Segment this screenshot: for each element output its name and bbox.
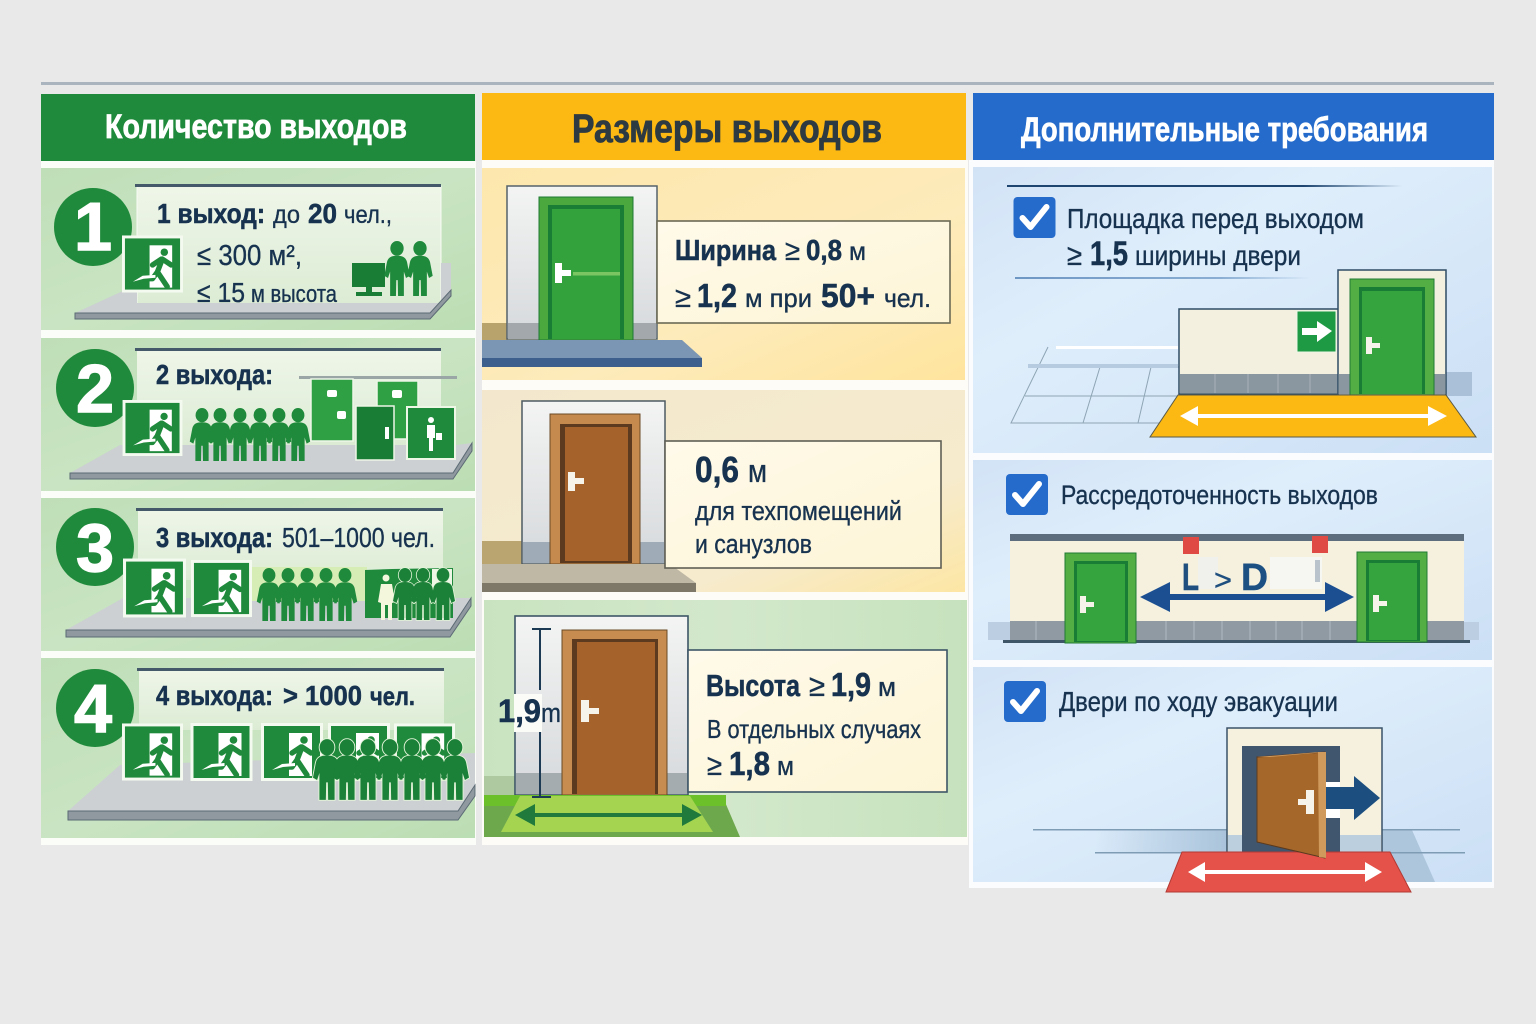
text: 2 выхода: 2 выхода: xyxy=(156,359,273,390)
callout: 0,6 м: и санузлов xyxy=(695,529,812,559)
markers: red squares xyxy=(1183,536,1328,554)
text: площадка: ≥ xyxy=(1067,239,1082,272)
number 2: 2 xyxy=(76,351,114,427)
callout: ширина: чел. xyxy=(884,283,931,313)
text: 1 выход: до xyxy=(273,201,300,229)
text: площадка xyxy=(1067,203,1364,273)
panel: ширина xyxy=(482,168,965,380)
text: 3 выхода xyxy=(156,522,435,553)
exit sign xyxy=(122,235,183,293)
callout: высота: м xyxy=(777,751,794,781)
text: 1 выход: ≤ 300 м², xyxy=(197,240,302,272)
text: 3 выхода: 501–1000 чел. xyxy=(282,522,435,553)
callout: ширина: ≥ xyxy=(675,282,691,314)
callout: высота: м xyxy=(878,672,896,702)
text: 4 выхода xyxy=(156,680,415,711)
wall xyxy=(988,534,1479,643)
text: 1 выход: м высота xyxy=(251,281,338,308)
mat: yellow with arrow xyxy=(1150,395,1476,437)
number 3: 3 xyxy=(76,510,114,586)
callout: высота: 1,9 xyxy=(831,666,871,703)
callout: ширина: 1,2 xyxy=(697,277,737,314)
wall with opening xyxy=(1227,728,1382,853)
number 2 xyxy=(56,349,134,427)
arrow: double distance xyxy=(1140,582,1354,612)
callout: высота: Высота xyxy=(706,668,801,703)
icon: crowd xyxy=(257,568,357,621)
door: brown narrow xyxy=(522,401,665,564)
callout: 0,6 м: м xyxy=(748,453,767,489)
text: 4 выхода: 4 выхода: xyxy=(156,680,273,711)
callout: высота: ≥ xyxy=(809,668,825,703)
floor lines xyxy=(1033,829,1465,882)
heading: дополнительные требования xyxy=(973,93,1494,160)
callout: 0,6 м: для техпомещений xyxy=(695,496,902,526)
door: brown with dimension xyxy=(515,616,688,795)
door: left xyxy=(1065,553,1136,643)
text: площадка: Площадка перед выходом xyxy=(1067,203,1364,234)
icon: computer and people xyxy=(352,241,433,296)
text: 4 выхода: > 1000 xyxy=(283,680,362,711)
exit signs xyxy=(122,723,455,781)
callout: ширина: Ширина xyxy=(675,235,777,267)
callout: ширина: 0,8 xyxy=(806,235,842,267)
text: площадка: ширины двери xyxy=(1135,240,1301,271)
door: green xyxy=(1338,270,1446,395)
callout: ширина: м при xyxy=(745,283,812,313)
dimension: 1,9 m: 1,9 xyxy=(498,693,541,729)
text: 4 выхода: чел. xyxy=(370,681,415,711)
heading: размеры выходов xyxy=(482,93,966,160)
mat: red with arrow xyxy=(1166,852,1411,892)
callout: высота: ≥ xyxy=(707,749,722,782)
panel: рассредоточенность выходов xyxy=(973,460,1492,660)
text: рассредоточенность: Рассредоточенность выходов xyxy=(1061,480,1378,510)
text: 1 выход: ≤ 15 xyxy=(197,277,245,308)
exit signs xyxy=(123,559,252,617)
panel: высота xyxy=(484,600,967,837)
label: L > D: L xyxy=(1182,557,1199,599)
text: 1 выход: 20 xyxy=(308,198,337,229)
number 4: 4 xyxy=(74,671,112,747)
panel: 1 выход xyxy=(41,168,475,330)
wall with exit sign xyxy=(1179,309,1340,394)
panel: 2 выхода xyxy=(41,338,475,491)
icon: checkbox xyxy=(1004,681,1046,722)
callout: высота xyxy=(688,650,947,792)
panel: 3 выхода xyxy=(41,498,475,651)
exit sign xyxy=(123,400,182,456)
icon: exit door with crowd xyxy=(365,568,455,620)
text: двери: Двери по ходу эвакуации xyxy=(1059,686,1338,717)
icon: checkbox xyxy=(1006,474,1048,515)
text: площадка: 1,5 xyxy=(1090,235,1128,273)
callout: ширина: ≥ xyxy=(785,235,800,267)
arrow: direction xyxy=(1325,776,1380,820)
dimension: 1,9 m xyxy=(498,629,561,797)
text: 3 выхода: 3 выхода: xyxy=(156,522,273,553)
door: opening outward xyxy=(1257,752,1326,858)
number 1: 1 xyxy=(74,189,112,265)
label: L > D: D xyxy=(1241,557,1268,599)
floor grid xyxy=(1011,346,1180,423)
label: L > D xyxy=(1182,557,1322,599)
icon: exit doors xyxy=(299,376,457,460)
dimension: 1,9 m: m xyxy=(541,698,561,728)
column: white backing left xyxy=(41,161,476,845)
callout: 0,6 м xyxy=(665,441,941,568)
panel: двери по ходу эвакуации xyxy=(973,667,1492,892)
panel: площадка перед выходом xyxy=(973,167,1492,453)
callout: ширина: 50+ xyxy=(821,277,875,314)
callout: высота: В отдельных случаях xyxy=(707,714,921,744)
text: 1 выход: чел., xyxy=(344,201,392,229)
number 4 xyxy=(56,669,134,747)
callout: 0,6 м: 0,6 xyxy=(695,449,739,490)
callout: ширина: м xyxy=(849,236,866,266)
panel: 0,6 м xyxy=(482,390,965,592)
door: right xyxy=(1357,552,1427,642)
mat with arrow xyxy=(501,796,713,832)
icon: checkbox xyxy=(1014,197,1056,238)
heading: количество выходов xyxy=(41,94,475,161)
number 3 xyxy=(56,508,134,586)
label: L > D: > xyxy=(1214,564,1232,597)
door: green xyxy=(507,186,657,340)
icon: crowd xyxy=(313,739,469,800)
callout: ширина xyxy=(657,221,950,323)
icon: crowd xyxy=(190,408,310,461)
column: white backing right xyxy=(969,160,1494,888)
text: 1 выход xyxy=(157,198,392,308)
number 1 xyxy=(54,188,132,266)
panel: 4 выхода xyxy=(41,658,475,838)
heading: размеры выходов: Размеры выходов xyxy=(572,107,882,151)
text: 1 выход: 1 выход: xyxy=(157,198,265,229)
heading: дополнительные требования: Дополнительные требования xyxy=(1021,111,1428,149)
column: white backing middle xyxy=(482,160,968,845)
heading: количество выходов: Количество выходов xyxy=(105,108,407,146)
callout: высота: 1,8 xyxy=(729,745,770,782)
